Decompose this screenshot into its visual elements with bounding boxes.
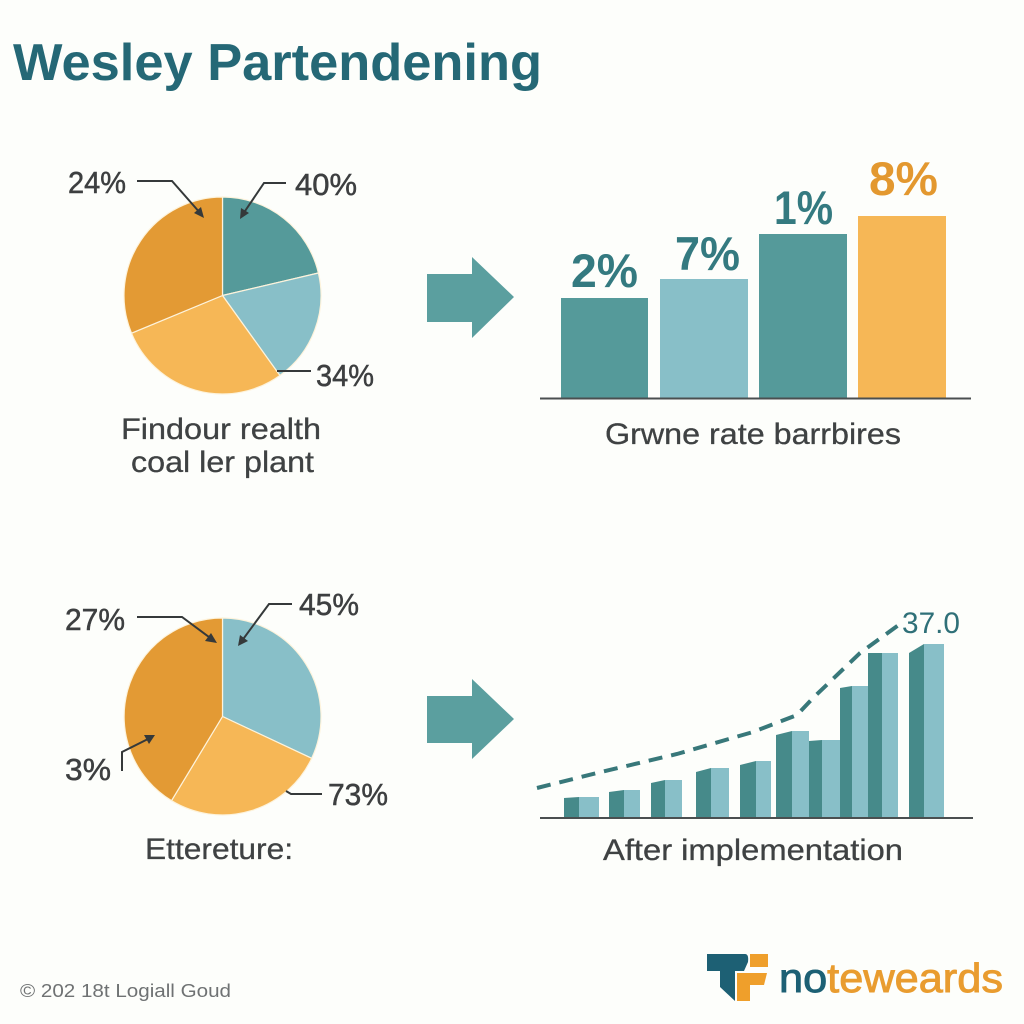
caption: top left [121, 413, 321, 479]
pie chart: bottom [124, 618, 321, 815]
label: 27%: 27% [65, 602, 125, 637]
label: 73% [286, 777, 388, 812]
title: Wesley Partendening [13, 34, 542, 92]
pie chart: top [124, 197, 321, 394]
panel: bottom left pie chart [65, 587, 388, 866]
caption: top right: Grwne rate barrbires [605, 418, 901, 451]
label: 3% [65, 735, 155, 787]
caption: bottom left: Ettereture: [145, 833, 293, 866]
dual-tone bars [564, 644, 944, 817]
label: 34% [277, 358, 374, 393]
dashed trend line [537, 624, 900, 788]
arrow: top [427, 257, 514, 338]
value label: 37.0: 37.0 [902, 607, 960, 640]
footer copyright: © 202 18t Logiall Goud [20, 980, 231, 1001]
axis [540, 817, 973, 819]
logo wordmark: noteweards [779, 955, 1003, 1001]
label: 73%: 73% [328, 777, 388, 812]
caption: top left: coal ler plant [131, 446, 314, 479]
axis [540, 398, 971, 400]
arrow: bottom [427, 679, 514, 759]
bars [561, 216, 946, 398]
panel: bottom right growth chart [537, 607, 973, 867]
label: 34%: 34% [316, 358, 374, 393]
bar label: 8%: 8% [869, 152, 938, 205]
caption: bottom right: After implementation [603, 834, 903, 867]
label: 24% [68, 165, 204, 218]
label: 27% [65, 602, 217, 643]
panel: top left pie chart [68, 165, 374, 479]
label: 45%: 45% [299, 587, 359, 622]
label: 24%: 24% [68, 165, 126, 200]
caption: top left: Findour realth [121, 413, 321, 446]
logo: noteweards [707, 954, 1003, 1001]
bar label: 2%: 2% [571, 244, 638, 297]
label: 45% [238, 587, 359, 646]
bar label: 1%: 1% [774, 181, 833, 234]
bar label: 7%: 7% [675, 227, 740, 280]
label: 40%: 40% [295, 167, 357, 202]
logo icon [707, 954, 768, 1001]
panel: top right bar chart [540, 152, 971, 451]
label: 3%: 3% [65, 752, 111, 787]
label: 40% [240, 167, 357, 219]
